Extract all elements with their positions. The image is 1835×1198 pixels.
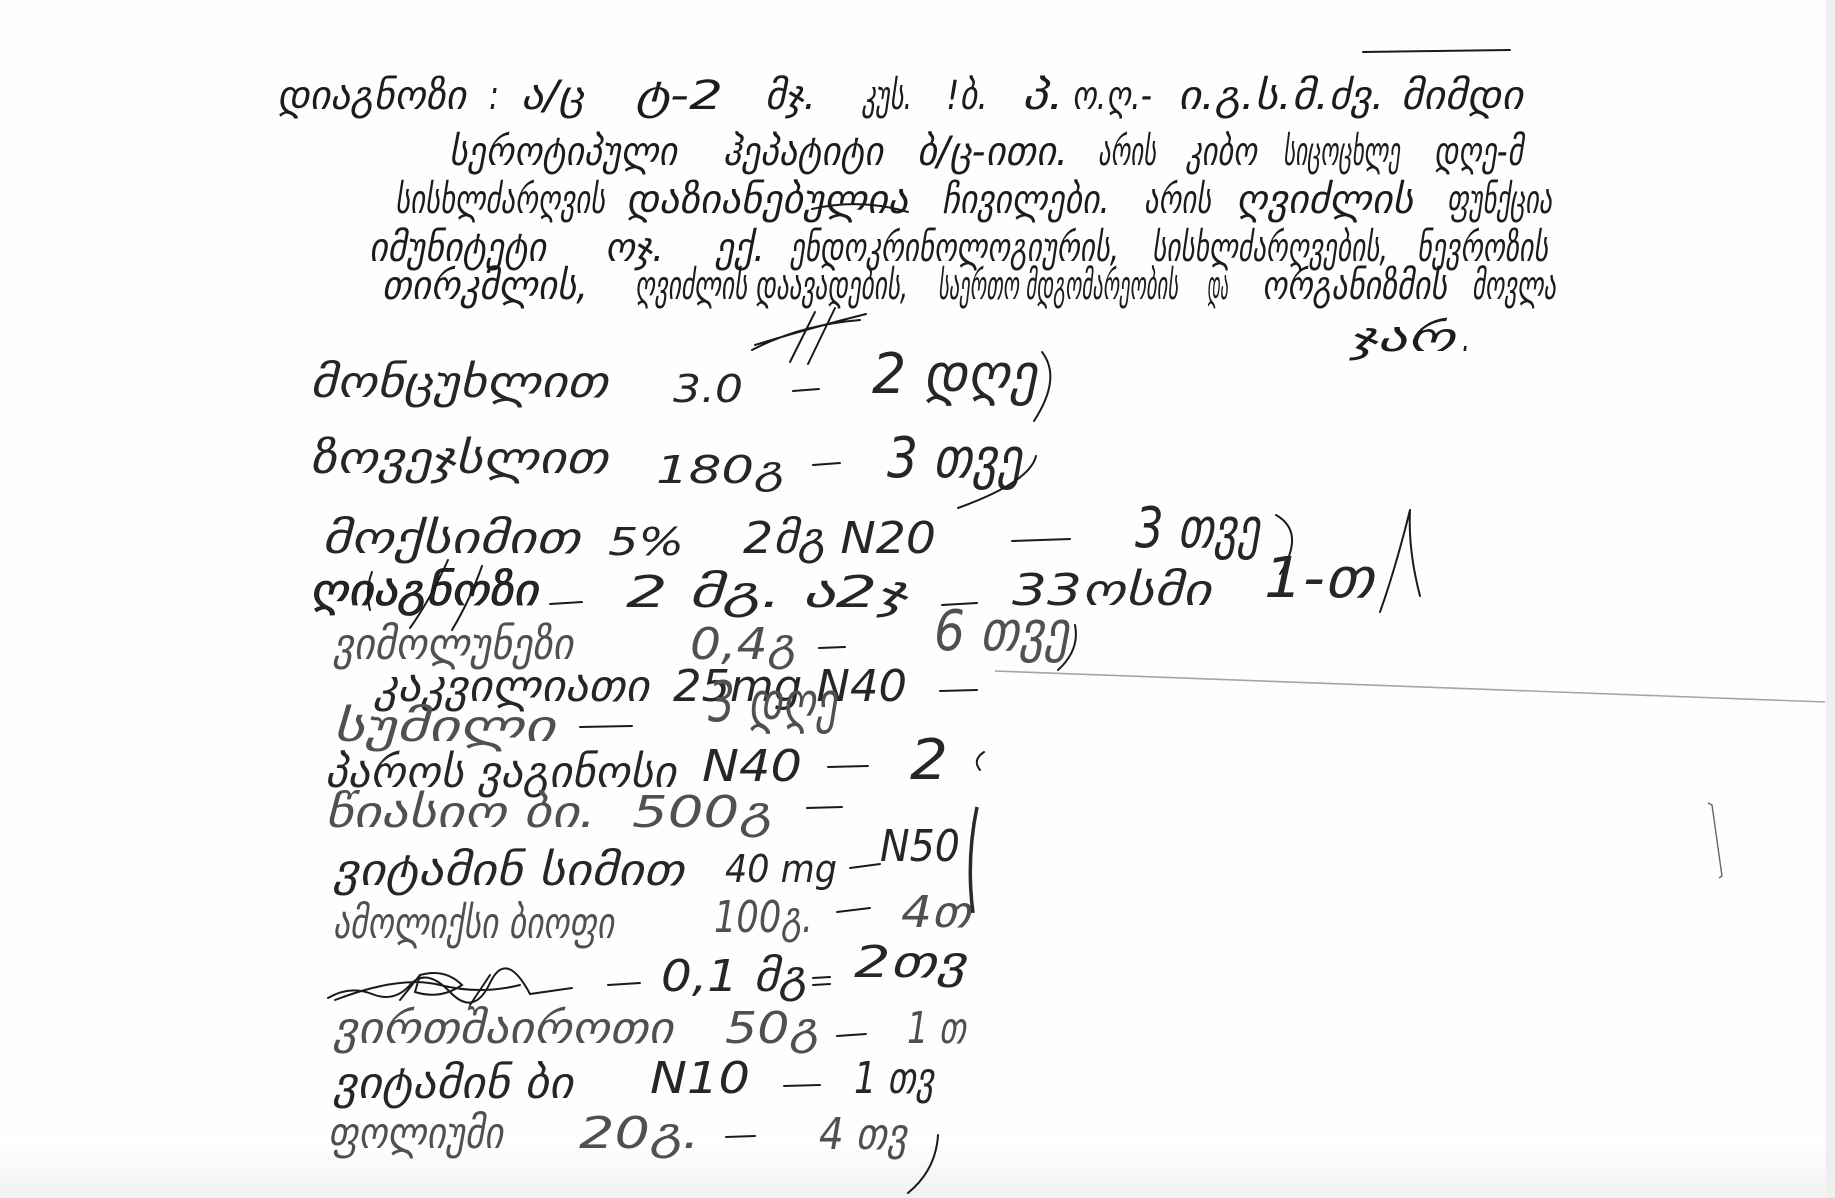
overline above heading: [1363, 50, 1510, 52]
paragraph line 5: ჯარ: [1349, 315, 1458, 361]
row 7: [333, 670, 839, 752]
row 12: struck-out item: 2თვ: [854, 937, 969, 988]
row 5: [332, 599, 1076, 670]
diagnosis heading line: დიაგნოზი: [277, 73, 468, 119]
row 5: 6 თვე: [934, 599, 1071, 664]
paragraph line 1: დღე-მ: [1434, 129, 1526, 175]
row 11: 100გ.: [714, 892, 813, 943]
row 1: 2 დღე: [872, 342, 1039, 407]
row 14: 1 თვ: [854, 1053, 936, 1104]
row 3: 5%: [608, 520, 684, 564]
row 8: 2: [910, 728, 948, 793]
diagnosis heading line: ძვ.: [1329, 73, 1384, 119]
row 7: 3 დღე: [708, 670, 839, 735]
row 2: 180გ: [656, 448, 784, 492]
row 15: 4 თვ: [819, 1109, 909, 1160]
row 9: წიასიო ბი.: [325, 787, 596, 838]
paragraph line 1: სიცოცხლე: [1283, 129, 1402, 175]
row 8: [325, 728, 984, 798]
diagnosis heading line: ი.გ.ს.მ.: [1178, 73, 1329, 119]
diagnosis heading line: !ბ.: [946, 73, 988, 119]
row 3: 2მგ N20: [743, 513, 936, 564]
diagnosis heading line: :: [489, 73, 499, 119]
paragraph line 1: სეროტიპული: [449, 129, 679, 175]
row 8: პაროს ვაგინოსი: [325, 747, 679, 798]
paragraph line 1: [449, 129, 1526, 175]
row 13: 50გ: [725, 1003, 819, 1054]
paragraph line 2: ღვიძლის: [1236, 177, 1414, 223]
diagnosis heading line: [277, 73, 1525, 119]
row 13: ვირთშაიროთი: [332, 1003, 677, 1054]
row 1: 3.0: [673, 367, 743, 411]
row 1: [310, 342, 1050, 421]
paragraph line 4: მოვლა: [1472, 263, 1556, 309]
row 3: [322, 496, 1420, 612]
diagnosis heading line: მჯ.: [765, 73, 816, 119]
row 10: 40 mg: [725, 847, 837, 891]
row 9: [325, 787, 842, 838]
pasted blank sheet edge: [995, 671, 1825, 702]
row 4: [310, 560, 1215, 630]
paragraph line 1: ბ/ც-ითი.: [917, 129, 1068, 175]
paragraph line 3: იმუნიტეტი: [369, 225, 548, 271]
paragraph line 1: არის: [1098, 129, 1157, 175]
diagnosis heading line: ტ-2: [635, 73, 723, 119]
paragraph line 2: სისხლძარღვის: [395, 177, 606, 223]
row 15: 20გ.: [579, 1108, 700, 1159]
paragraph line 3: ოჯ.: [605, 225, 664, 271]
row 15: ფოლიუმი: [328, 1108, 506, 1159]
row 7: სუმილი: [333, 701, 559, 752]
paragraph line 5: .: [1462, 315, 1470, 361]
row 4: 2 მგ. ა2ჯ: [626, 567, 910, 618]
paragraph line 2: ფუნქცია: [1447, 177, 1552, 223]
row 2: ზოვეჯსლით: [310, 433, 611, 484]
row 9: 500გ: [632, 787, 772, 838]
paragraph line 2: ჩივილები.: [942, 177, 1110, 223]
row 6: [373, 661, 977, 712]
paragraph line 1: კიბო: [1185, 129, 1259, 175]
margin stroke beside the list: [970, 807, 977, 913]
paragraph line 2: [395, 177, 1552, 223]
paragraph line 1: ჰეპატიტი: [723, 129, 885, 175]
paragraph line 4: და: [1207, 263, 1228, 309]
row 8: N40: [702, 741, 802, 792]
row 15: [328, 1108, 938, 1193]
row 3: 3 თვე: [1135, 496, 1262, 561]
row 6: კაკვილიათი: [373, 661, 652, 712]
row 6: 25mg N40: [673, 661, 907, 712]
paragraph line 3: სისხლძარღვების,: [1152, 225, 1388, 271]
diagnosis heading line: მიმდი: [1401, 73, 1525, 119]
paragraph line 3: ენდოკრინოლოგიურის,: [789, 225, 1119, 271]
paragraph line 3: ნევროზის: [1417, 225, 1549, 271]
row 11: ამოლიქსი ბიოფი: [333, 898, 616, 949]
row 2: 3 თვე: [887, 426, 1024, 491]
paragraph: clinical description: [369, 129, 1556, 361]
row 12: struck-out item: 0,1 მგ: [661, 951, 807, 1002]
row 13: 1 თ: [907, 1003, 968, 1054]
paragraph line 4: საერთო მდგომარეობის: [938, 263, 1179, 309]
row 14: [332, 1053, 936, 1109]
row 3: 1-თ: [1264, 546, 1377, 611]
diagnosis heading line: ა/ც: [521, 73, 585, 119]
paragraph line 5: [1349, 315, 1470, 361]
row 11: [333, 887, 974, 949]
row 11: 4თ: [901, 887, 974, 938]
diagnosis heading line: კუს.: [861, 73, 912, 119]
rx symbol: [752, 308, 866, 364]
paragraph line 2: დაზიანებულია: [626, 177, 909, 223]
row 10: ვიტამინ სიმით: [332, 845, 687, 896]
paragraph line 4: ორგანიზმის: [1262, 263, 1448, 309]
diagnosis heading line: პ.: [1022, 73, 1064, 119]
row 10: [332, 821, 960, 896]
row 14: ვიტამინ ბი: [332, 1058, 576, 1109]
row 3: მოქსიმით: [322, 513, 583, 564]
paragraph line 2: არის: [1144, 177, 1212, 223]
row 5: 0,4გ: [690, 619, 796, 670]
row 4: 33ოსმი: [1012, 565, 1215, 616]
row 12: struck-out item: [328, 937, 969, 1005]
paragraph line 4: ღვიძლის დაავადების,: [635, 263, 908, 309]
row 2: [310, 426, 1036, 508]
medication list: [310, 342, 1420, 1193]
row 1: მონცუხლით: [310, 357, 611, 408]
paragraph line 3: ექ.: [714, 225, 765, 271]
row 14: N10: [650, 1053, 750, 1104]
row 5: ვიმოლუნეზი: [332, 619, 576, 670]
row 4: ღიაგნოზი: [310, 565, 542, 616]
row 10: N50: [880, 821, 960, 872]
diagnosis heading line: ო.ღ.-: [1072, 73, 1152, 119]
paragraph line 4: [382, 263, 1556, 309]
row 13: [332, 1003, 968, 1054]
small bracket mark: [1708, 803, 1722, 878]
paragraph line 4: თირკმლის,: [382, 263, 588, 309]
paragraph line 3: [369, 225, 1549, 271]
